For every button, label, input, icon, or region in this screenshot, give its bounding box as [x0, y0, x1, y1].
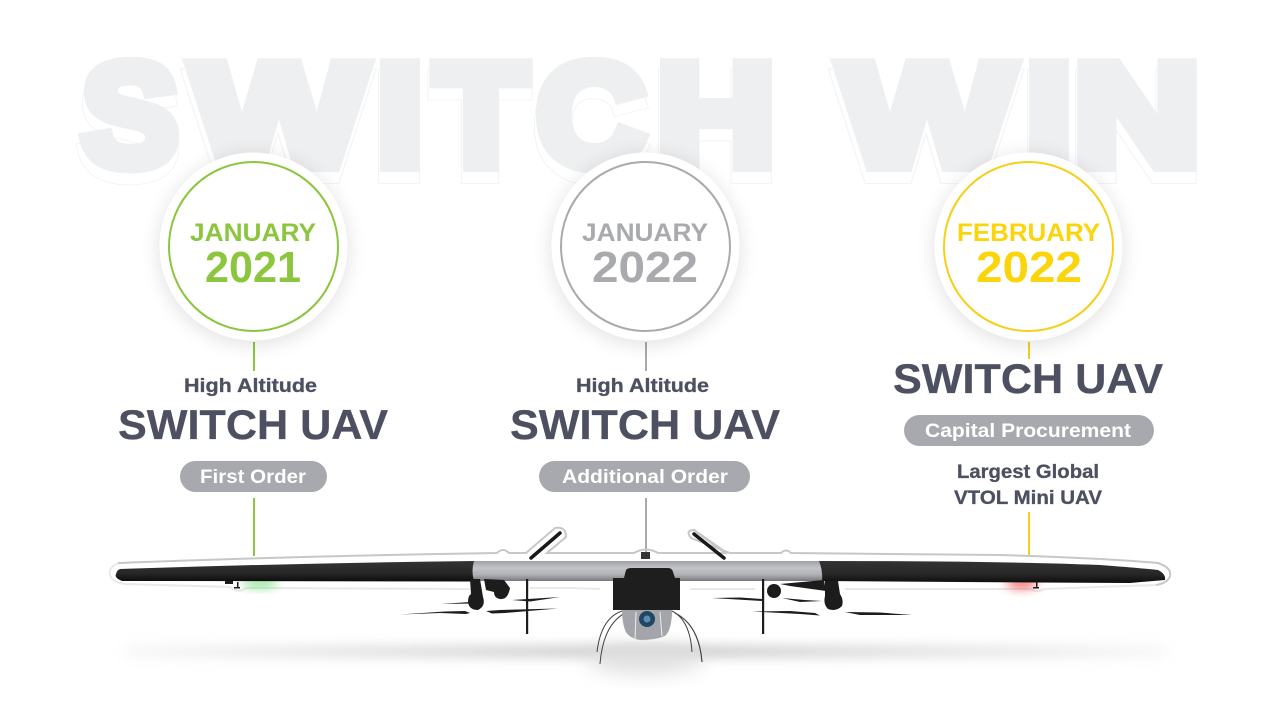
- milestone: January 2022: [510, 152, 780, 492]
- milestone: January 2021: First Order: [200, 467, 307, 488]
- background title: SWITCH WIN: S: [81, 45, 177, 207]
- right motors: [712, 579, 1039, 634]
- right rotors: [762, 579, 764, 634]
- milestone: January 2022: Additional Order: [562, 467, 729, 488]
- ground shadow: [125, 646, 1165, 674]
- milestone: January 2022: JANUARY: [582, 219, 708, 247]
- background title: SWITCH WIN: I: [376, 45, 422, 207]
- background title: SWITCH WIN: I: [376, 45, 422, 207]
- background title: SWITCH WIN: W: [192, 45, 364, 207]
- background title: SWITCH WIN: C: [536, 45, 644, 207]
- background title: SWITCH WIN: N: [1073, 45, 1199, 207]
- milestone: January 2021: SWITCH UAV: [118, 401, 388, 448]
- background title: SWITCH WIN: H: [656, 45, 774, 207]
- milestone: February 2022: FEBRUARY: [957, 219, 1100, 247]
- background title: SWITCH WIN: W: [192, 45, 364, 207]
- milestone: February 2022: 2022: [976, 243, 1082, 292]
- milestone: February 2022: Largest Global: [957, 462, 1099, 483]
- background title: SWITCH WIN: N: [1073, 45, 1199, 207]
- background title: SWITCH WIN: I: [377, 34, 423, 196]
- background title: SWITCH WIN: C: [537, 34, 645, 196]
- milestone: February 2022: Capital Procurement: [925, 421, 1132, 442]
- background title: SWITCH WIN: W: [841, 34, 1013, 196]
- drone sticker halo: [110, 554, 1170, 589]
- background title: SWITCH WIN: T: [435, 34, 527, 196]
- background title: SWITCH WIN: W: [840, 45, 1012, 207]
- milestone: February 2022: SWITCH UAV: [893, 355, 1163, 402]
- background title: SWITCH WIN: [81, 34, 1200, 207]
- milestone: January 2021: JANUARY: [190, 219, 316, 247]
- camera gimbal: [622, 610, 672, 640]
- background title: SWITCH WIN: W: [840, 45, 1012, 207]
- background title: SWITCH WIN: I: [1026, 34, 1072, 196]
- milestone: January 2022: SWITCH UAV: [510, 401, 780, 448]
- background title: SWITCH WIN: H: [657, 34, 775, 196]
- background title: SWITCH WIN: I: [1025, 45, 1071, 207]
- right wing: [819, 561, 1165, 583]
- center body: [613, 568, 680, 610]
- rear fins: [531, 533, 560, 558]
- left wing: [116, 561, 474, 582]
- background title: SWITCH WIN: C: [536, 45, 644, 207]
- left rotors: [526, 579, 528, 634]
- background title: SWITCH WIN: S: [82, 34, 178, 196]
- fuselage boom: [472, 561, 822, 581]
- milestone: February 2022: VTOL Mini UAV: [954, 488, 1102, 509]
- drone lower outline: [110, 563, 1156, 591]
- milestone: February 2022: [893, 152, 1163, 509]
- mast: [641, 552, 650, 559]
- background title: SWITCH WIN: I: [1025, 45, 1071, 207]
- drone upper outline: [118, 528, 1170, 585]
- milestone: January 2021: [118, 152, 388, 492]
- glow: green wing light: [242, 578, 278, 588]
- background title: SWITCH WIN: T: [434, 45, 526, 207]
- background title: SWITCH WIN: N: [1074, 34, 1200, 196]
- milestone: January 2022: 2022: [592, 243, 698, 292]
- background title: SWITCH WIN: W: [193, 34, 365, 196]
- landing legs: [597, 611, 702, 664]
- background title: SWITCH WIN: S: [81, 45, 177, 207]
- milestone: January 2021: High Altitude: [184, 376, 317, 397]
- left motors: [225, 579, 560, 634]
- background title: SWITCH WIN: H: [656, 45, 774, 207]
- drone illustration: [110, 528, 1170, 664]
- glow: red wing light: [1006, 577, 1038, 589]
- background title: SWITCH WIN: T: [434, 45, 526, 207]
- connector lines: [254, 342, 1029, 556]
- milestone: January 2022: High Altitude: [576, 376, 709, 397]
- milestone: January 2021: 2021: [205, 243, 301, 292]
